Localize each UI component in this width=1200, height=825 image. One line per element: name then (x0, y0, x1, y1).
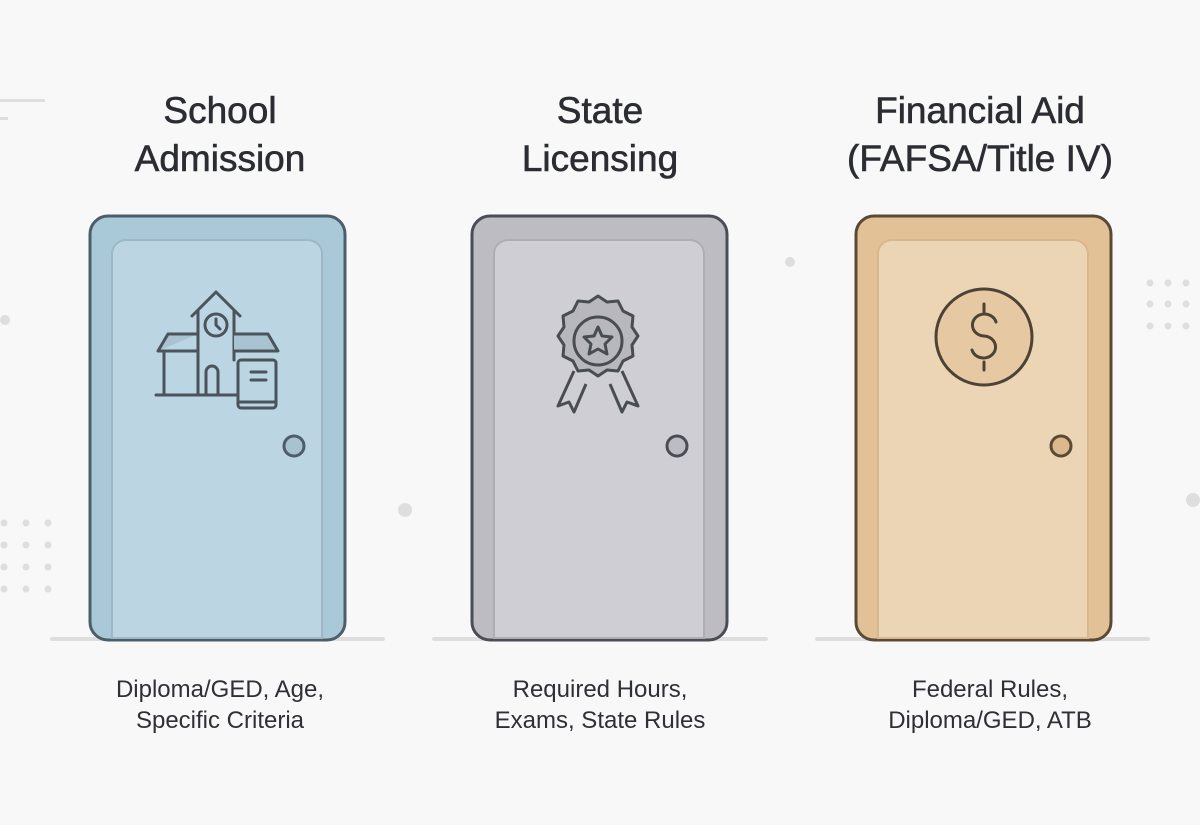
icon: dollar coin (936, 289, 1032, 385)
door: school (88, 214, 346, 642)
caption: financial aid (888, 676, 1092, 734)
door: financial aid (854, 214, 1112, 642)
title: State Licensing: State (557, 90, 643, 131)
title: School Admission (134, 90, 305, 179)
title: Financial Aid: (FAFSA/Title IV) (847, 138, 1113, 179)
caption: licensing: Required Hours, (513, 676, 687, 703)
caption: school: Diploma/GED, Age, (116, 676, 324, 703)
door knob (667, 436, 687, 456)
caption: licensing: Exams, State Rules (495, 707, 705, 734)
caption: school: Specific Criteria (136, 707, 304, 734)
door knob (284, 436, 304, 456)
door: licensing (470, 214, 728, 642)
title: State Licensing: Licensing (522, 138, 678, 179)
caption: licensing (495, 676, 705, 734)
title: Financial Aid: Financial Aid (875, 90, 1085, 131)
caption: financial aid: Diploma/GED, ATB (888, 707, 1092, 734)
title: School Admission: School (163, 90, 277, 131)
title: Financial Aid (847, 90, 1113, 179)
caption: school (116, 676, 324, 734)
caption: financial aid: Federal Rules, (912, 676, 1068, 703)
icon: award (558, 296, 638, 412)
title: School Admission: Admission (135, 138, 305, 179)
door knob (1051, 436, 1071, 456)
title: State Licensing (522, 90, 678, 179)
icon: school (156, 292, 278, 408)
